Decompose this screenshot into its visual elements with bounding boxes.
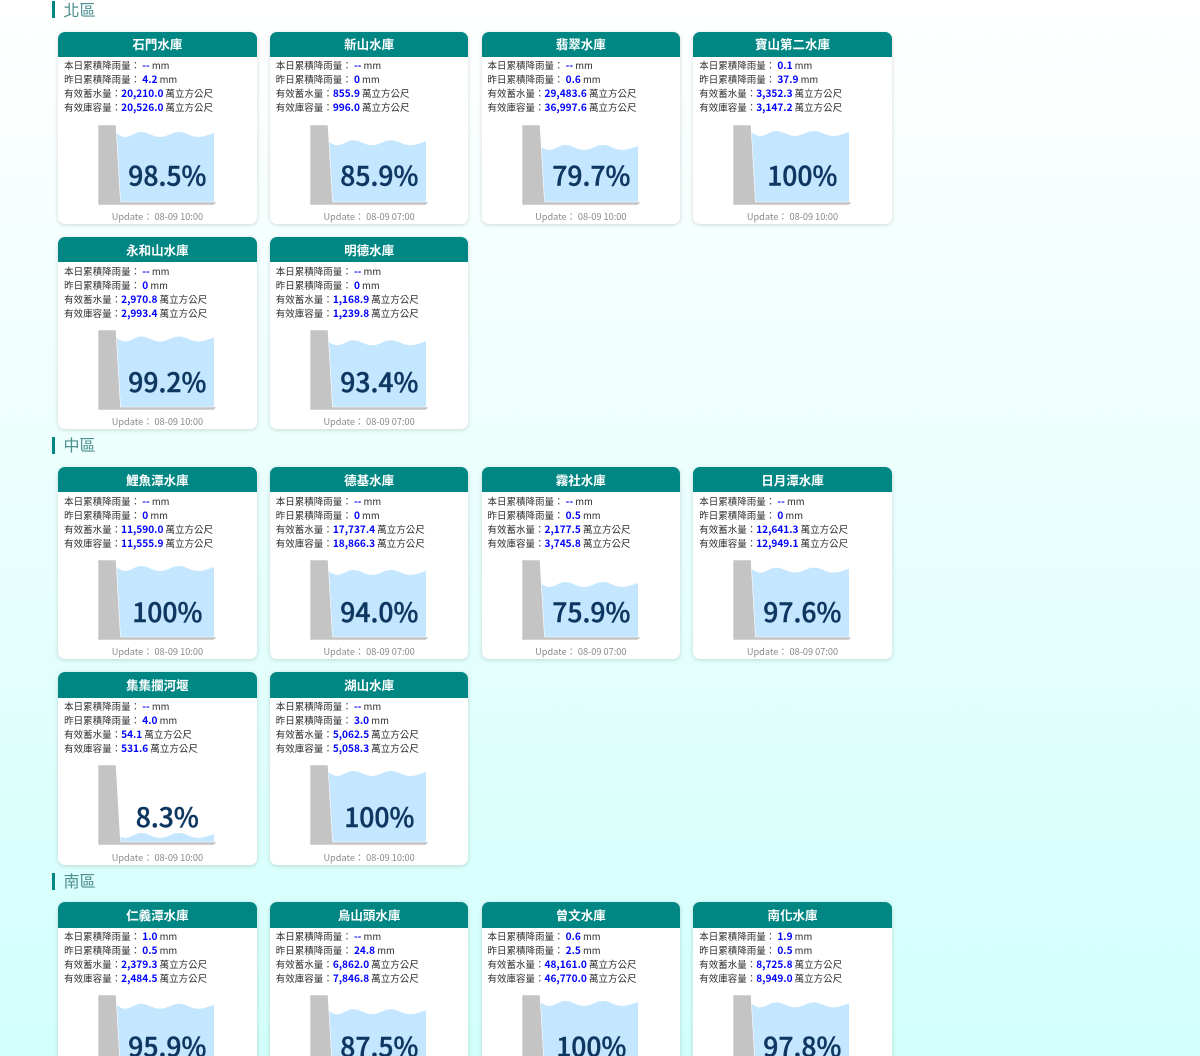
card: 南化水庫: 本日累積降雨量： 1.9 mm: [699, 928, 812, 943]
card: 霧社水庫: 有效庫容量：3,745.8 萬立方公尺: [488, 535, 630, 550]
card: 翡翠水庫: 有效庫容量：36,997.6 萬立方公尺: [488, 99, 636, 114]
card: 湖山水庫: 有效庫容量：5,058.3 萬立方公尺: [276, 740, 419, 755]
card: 霧社水庫: 昨日累積降雨量： 0.5 mm: [488, 507, 601, 522]
card: 德基水庫: 德基水庫: [344, 470, 394, 489]
card: 霧社水庫: 霧社水庫: [556, 470, 606, 489]
heading: 中區: [52, 437, 264, 454]
card: 霧社水庫: 本日累積降雨量： -- mm: [488, 493, 593, 508]
card: 永和山水庫: 昨日累積降雨量： 0 mm: [64, 277, 168, 292]
card: 霧社水庫: 有效蓄水量：2,177.5 萬立方公尺: [488, 521, 630, 536]
card: 仁義潭水庫: 仁義潭水庫: [126, 905, 189, 924]
card: 新山水庫: 昨日累積降雨量： 0 mm: [276, 71, 380, 86]
card: 石門水庫: [58, 32, 257, 224]
card: 烏山頭水庫: 有效蓄水量：6,862.0 萬立方公尺: [276, 956, 419, 971]
card: 日月潭水庫: 本日累積降雨量： -- mm: [699, 493, 805, 508]
card: 新山水庫: 85.9%: [340, 154, 418, 193]
card: 永和山水庫: Update： 08-09 10:00: [112, 414, 203, 428]
card: 鯉魚潭水庫: [58, 467, 257, 659]
card: 永和山水庫: [58, 237, 257, 429]
card: 永和山水庫: 有效庫容量：2,993.4 萬立方公尺: [64, 305, 207, 320]
card: 德基水庫: [270, 467, 468, 659]
card: 永和山水庫: 有效蓄水量：2,970.8 萬立方公尺: [64, 291, 207, 306]
card: 日月潭水庫: 昨日累積降雨量： 0 mm: [699, 507, 803, 522]
card: 德基水庫: Update： 08-09 07:00: [323, 644, 415, 658]
card: 石門水庫: 98.5%: [128, 154, 206, 193]
card: 霧社水庫: 75.9%: [552, 591, 630, 630]
card: 集集攔河堰: 昨日累積降雨量： 4.0 mm: [64, 712, 177, 727]
heading: 北區: [52, 1, 264, 18]
card: 曾文水庫: [482, 902, 680, 1056]
card: 曾文水庫: 曾文水庫: [556, 905, 606, 924]
card: 湖山水庫: 本日累積降雨量： -- mm: [276, 698, 381, 713]
card: 新山水庫: 新山水庫: [344, 34, 394, 53]
card: 寶山第二水庫: 100%: [767, 154, 838, 193]
card: 曾文水庫: 昨日累積降雨量： 2.5 mm: [488, 942, 601, 957]
card: 集集攔河堰: 8.3%: [136, 796, 199, 835]
card: 寶山第二水庫: 有效蓄水量：3,352.3 萬立方公尺: [699, 85, 842, 100]
card: 德基水庫: 本日累積降雨量： -- mm: [276, 493, 381, 508]
card: 德基水庫: 94.0%: [340, 591, 418, 630]
card: 翡翠水庫: 翡翠水庫: [556, 34, 606, 53]
card: 烏山頭水庫: [270, 902, 468, 1056]
card: 鯉魚潭水庫: 有效庫容量：11,555.9 萬立方公尺: [64, 535, 213, 550]
card: 日月潭水庫: 日月潭水庫: [761, 470, 824, 489]
card: 仁義潭水庫: 本日累積降雨量： 1.0 mm: [64, 928, 177, 943]
card: 曾文水庫: 本日累積降雨量： 0.6 mm: [488, 928, 601, 943]
card: 寶山第二水庫: 有效庫容量：3,147.2 萬立方公尺: [699, 99, 842, 114]
card: 明德水庫: 本日累積降雨量： -- mm: [276, 263, 381, 278]
card: 烏山頭水庫: 烏山頭水庫: [338, 905, 400, 924]
card: 曾文水庫: 有效庫容量：46,770.0 萬立方公尺: [488, 970, 636, 985]
card: 鯉魚潭水庫: 有效蓄水量：11,590.0 萬立方公尺: [64, 521, 213, 536]
card: 石門水庫: 有效庫容量：20,526.0 萬立方公尺: [64, 99, 213, 114]
card: 南化水庫: 南化水庫: [767, 905, 817, 924]
card: 石門水庫: 昨日累積降雨量： 4.2 mm: [64, 71, 177, 86]
card: 湖山水庫: Update： 08-09 10:00: [323, 850, 415, 864]
card: 日月潭水庫: [693, 467, 892, 659]
card: 石門水庫: 本日累積降雨量： -- mm: [64, 57, 169, 72]
card: 石門水庫: 石門水庫: [132, 34, 182, 53]
card: 明德水庫: [270, 237, 468, 429]
card: 南化水庫: [693, 902, 892, 1056]
card: 集集攔河堰: 有效庫容量：531.6 萬立方公尺: [64, 740, 198, 755]
card: 鯉魚潭水庫: 本日累積降雨量： -- mm: [64, 493, 169, 508]
card: 寶山第二水庫: [693, 32, 892, 224]
card: 日月潭水庫: Update： 08-09 07:00: [747, 644, 838, 658]
card: 翡翠水庫: [482, 32, 680, 224]
card: 日月潭水庫: 有效庫容量：12,949.1 萬立方公尺: [699, 535, 848, 550]
card: 鯉魚潭水庫: 昨日累積降雨量： 0 mm: [64, 507, 168, 522]
card: 明德水庫: 明德水庫: [344, 240, 394, 259]
card: 南化水庫: 有效庫容量：8,949.0 萬立方公尺: [699, 970, 842, 985]
card: 仁義潭水庫: 有效庫容量：2,484.5 萬立方公尺: [64, 970, 207, 985]
card: 鯉魚潭水庫: 100%: [132, 591, 202, 630]
card: 鯉魚潭水庫: 鯉魚潭水庫: [126, 470, 189, 489]
card: 集集攔河堰: 本日累積降雨量： -- mm: [64, 698, 169, 713]
card: 翡翠水庫: 79.7%: [552, 154, 630, 193]
card: 新山水庫: 有效庫容量：996.0 萬立方公尺: [276, 99, 410, 114]
card: 石門水庫: Update： 08-09 10:00: [112, 209, 203, 223]
card: 新山水庫: 有效蓄水量：855.9 萬立方公尺: [276, 85, 410, 100]
heading: 南區: [52, 873, 264, 890]
card: 新山水庫: 本日累積降雨量： -- mm: [276, 57, 381, 72]
card: 德基水庫: 有效庫容量：18,866.3 萬立方公尺: [276, 535, 425, 550]
card: 永和山水庫: 永和山水庫: [126, 240, 189, 259]
card: 寶山第二水庫: 本日累積降雨量： 0.1 mm: [699, 57, 812, 72]
card: 烏山頭水庫: 本日累積降雨量： -- mm: [276, 928, 381, 943]
card: 南化水庫: 昨日累積降雨量： 0.5 mm: [699, 942, 812, 957]
card: 德基水庫: 昨日累積降雨量： 0 mm: [276, 507, 380, 522]
card: 翡翠水庫: 本日累積降雨量： -- mm: [488, 57, 593, 72]
card: 湖山水庫: 有效蓄水量：5,062.5 萬立方公尺: [276, 726, 419, 741]
card: 集集攔河堰: 集集攔河堰: [126, 675, 189, 694]
card: 明德水庫: 有效庫容量：1,239.8 萬立方公尺: [276, 305, 419, 320]
card: 霧社水庫: [482, 467, 680, 659]
card: 仁義潭水庫: 昨日累積降雨量： 0.5 mm: [64, 942, 177, 957]
card: 霧社水庫: Update： 08-09 07:00: [535, 644, 626, 658]
card: 烏山頭水庫: 有效庫容量：7,846.8 萬立方公尺: [276, 970, 419, 985]
card: 湖山水庫: 100%: [344, 796, 414, 835]
card: 明德水庫: 93.4%: [340, 361, 418, 400]
card: 明德水庫: 昨日累積降雨量： 0 mm: [276, 277, 380, 292]
card: 烏山頭水庫: 昨日累積降雨量： 24.8 mm: [276, 942, 395, 957]
card: 明德水庫: 有效蓄水量：1,168.9 萬立方公尺: [276, 291, 419, 306]
card: 石門水庫: 有效蓄水量：20,210.0 萬立方公尺: [64, 85, 213, 100]
card: 永和山水庫: 99.2%: [128, 361, 206, 400]
card: 湖山水庫: 湖山水庫: [344, 675, 394, 694]
card: 鯉魚潭水庫: Update： 08-09 10:00: [112, 644, 203, 658]
card: 曾文水庫: 有效蓄水量：48,161.0 萬立方公尺: [488, 956, 636, 971]
card: 湖山水庫: [270, 672, 468, 865]
card: 湖山水庫: 昨日累積降雨量： 3.0 mm: [276, 712, 389, 727]
card: 集集攔河堰: [58, 672, 257, 865]
card: 翡翠水庫: Update： 08-09 10:00: [535, 209, 626, 223]
card: 南化水庫: 有效蓄水量：8,725.8 萬立方公尺: [699, 956, 842, 971]
card: 翡翠水庫: 昨日累積降雨量： 0.6 mm: [488, 71, 601, 86]
card: 永和山水庫: 本日累積降雨量： -- mm: [64, 263, 169, 278]
card: 新山水庫: Update： 08-09 07:00: [323, 209, 415, 223]
card: 明德水庫: Update： 08-09 07:00: [323, 414, 415, 428]
heading: 南區: 南區: [64, 868, 96, 892]
heading: 中區: 中區: [64, 432, 96, 456]
card: 仁義潭水庫: [58, 902, 257, 1056]
card: 集集攔河堰: 有效蓄水量：54.1 萬立方公尺: [64, 726, 192, 741]
card: 翡翠水庫: 有效蓄水量：29,483.6 萬立方公尺: [488, 85, 636, 100]
card: 集集攔河堰: Update： 08-09 10:00: [112, 850, 203, 864]
card: 寶山第二水庫: Update： 08-09 10:00: [747, 209, 838, 223]
card: 德基水庫: 有效蓄水量：17,737.4 萬立方公尺: [276, 521, 425, 536]
card: 日月潭水庫: 97.6%: [763, 591, 842, 630]
card: 日月潭水庫: 有效蓄水量：12,641.3 萬立方公尺: [699, 521, 848, 536]
card: 仁義潭水庫: 有效蓄水量：2,379.3 萬立方公尺: [64, 956, 207, 971]
card: 新山水庫: [270, 32, 468, 224]
card: 寶山第二水庫: 昨日累積降雨量： 37.9 mm: [699, 71, 818, 86]
card: 寶山第二水庫: 寶山第二水庫: [755, 34, 830, 53]
